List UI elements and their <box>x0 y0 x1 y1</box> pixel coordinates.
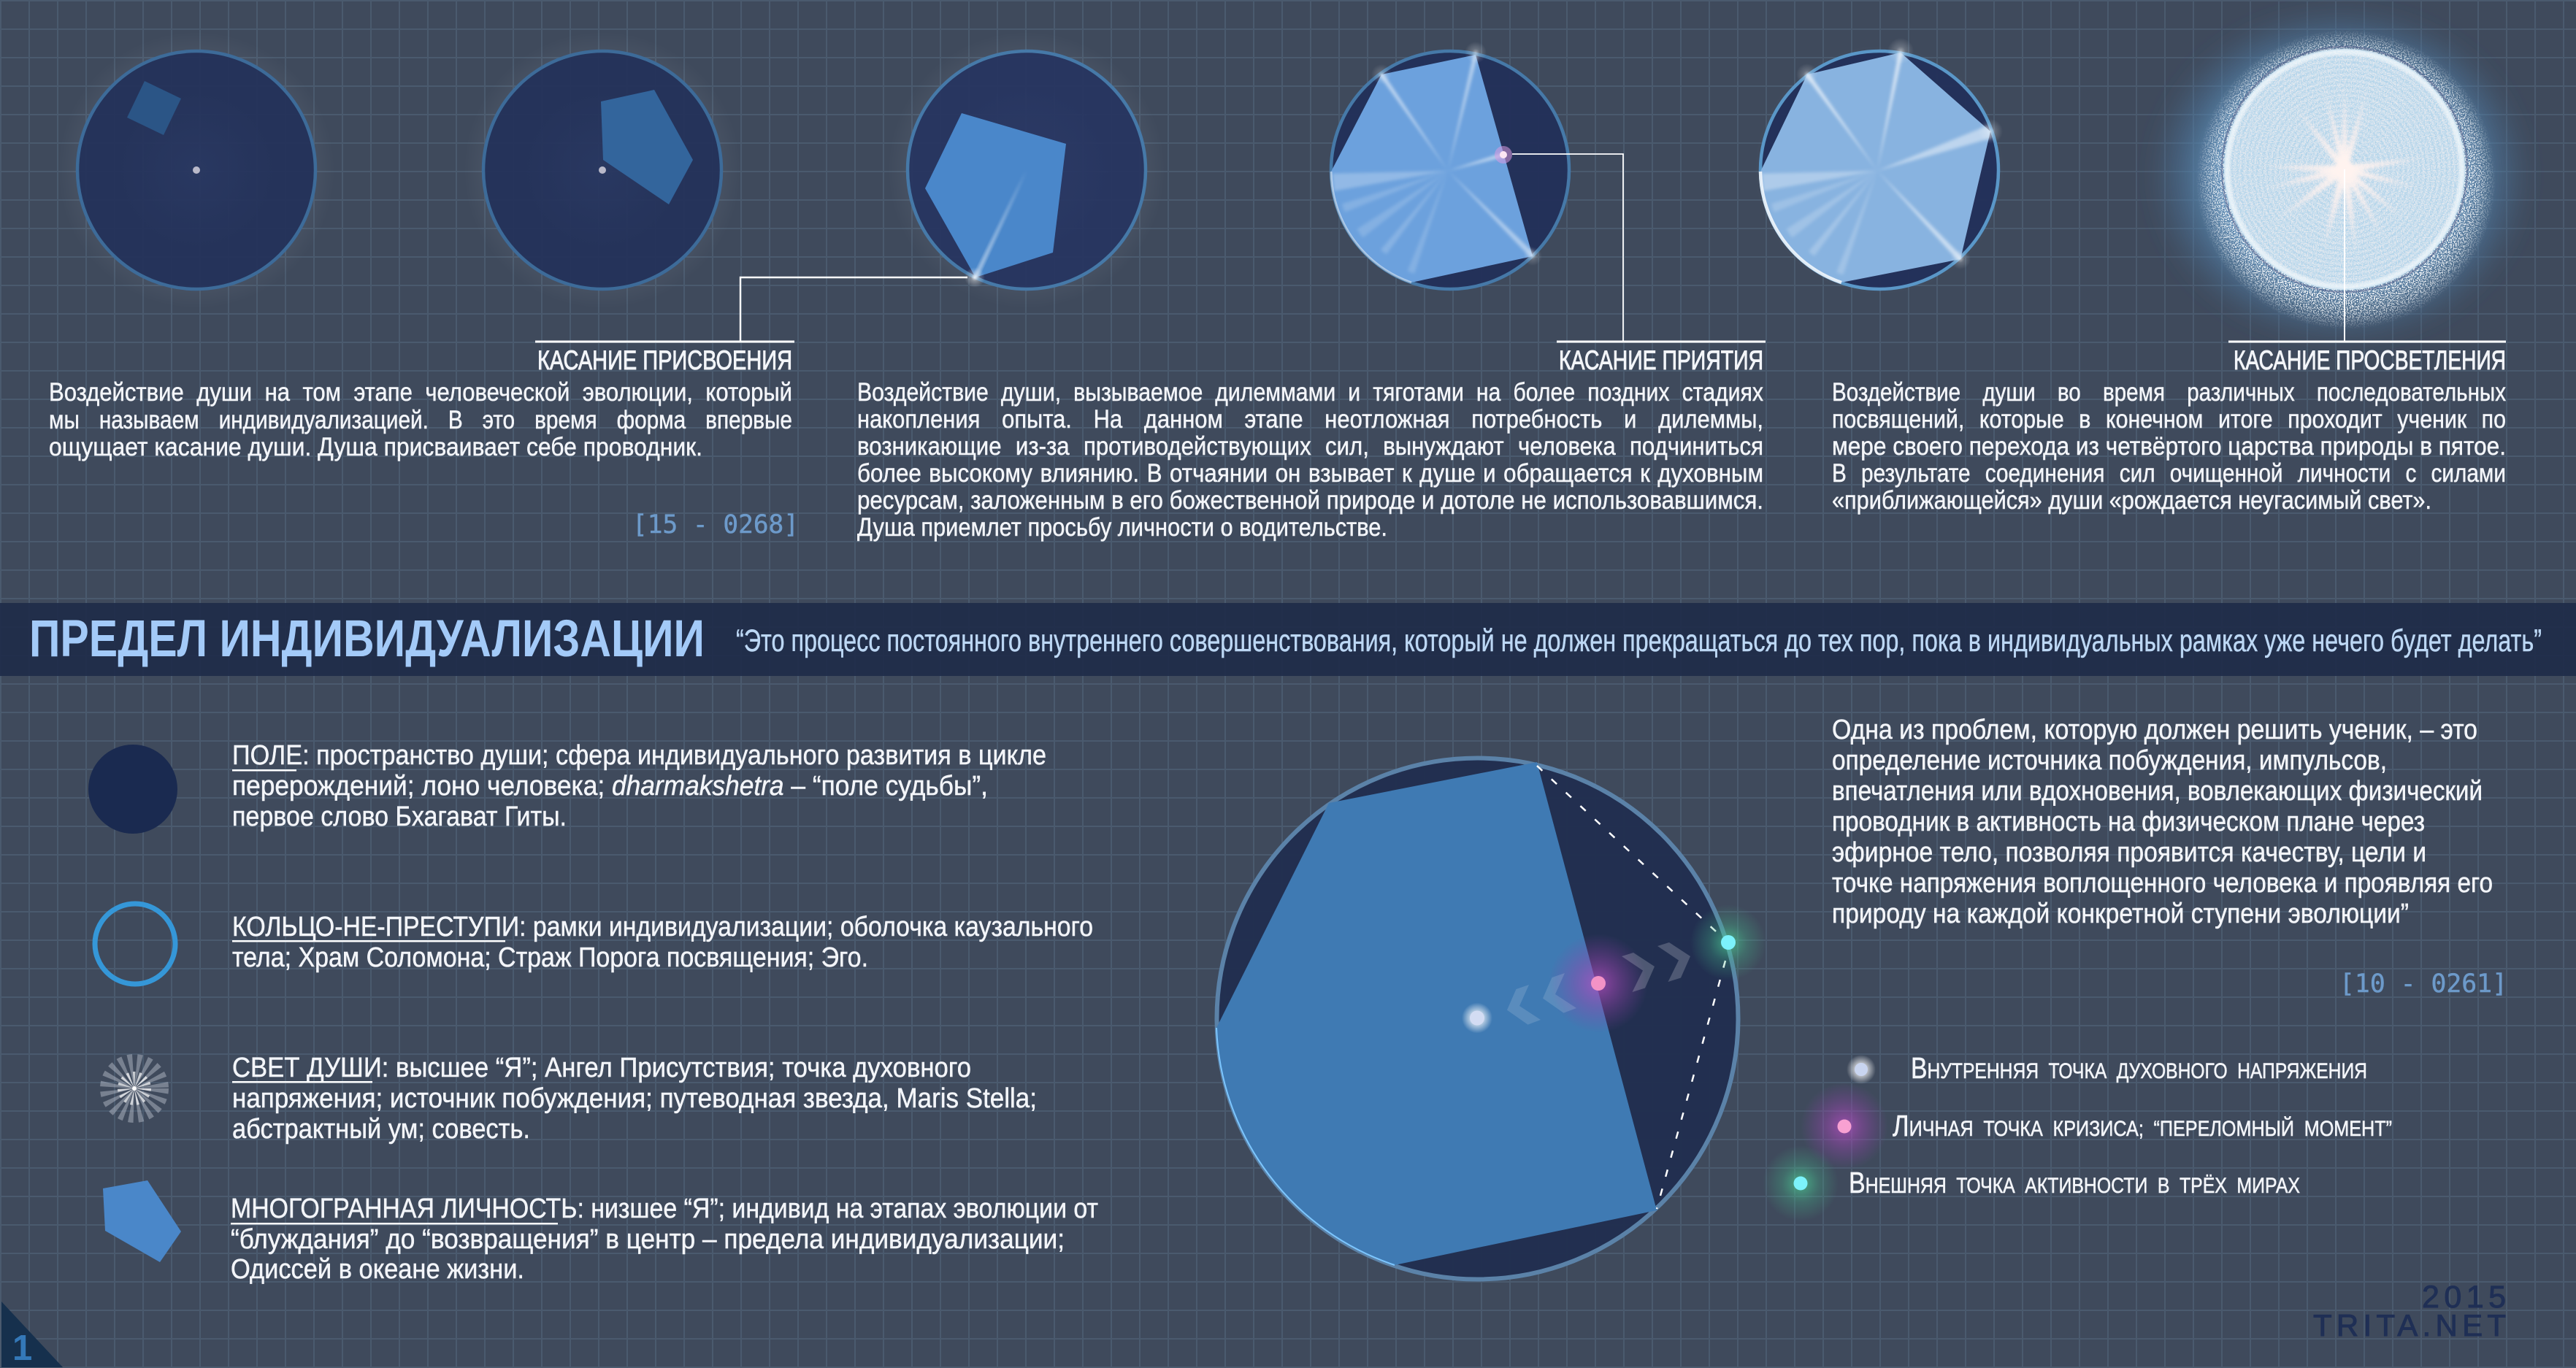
pink crisis glow <box>1549 934 1648 1033</box>
legend text: soul light <box>232 1053 1037 1145</box>
key: inner point: ВНУТРЕННЯЯ ТОЧКА ДУХОВНОГО НАПРЯЖЕНИЯ <box>1911 1051 2367 1085</box>
text block: appropriation: мы называем индивидуализацией. В это время форма впервые <box>49 406 792 434</box>
speckled halo <box>2196 30 2496 329</box>
text block: acceptance: Душа приемлет просьбу личности о водительстве. <box>857 513 1387 542</box>
legend text: ring-pass-not: тела; Храм Соломона; Страж Порога посвящения; Эго. <box>232 942 868 973</box>
inner point of spiritual tension <box>1462 1003 1492 1034</box>
quote text: определение источника побуждения, импульсов, <box>1832 745 2387 776</box>
field circle <box>1216 758 1738 1279</box>
key: outer point: ВНЕШНЯЯ ТОЧКА АКТИВНОСТИ В ТРЁХ МИРАХ <box>1849 1166 2300 1199</box>
text block: acceptance: Воздействие души, вызываемое дилеммами и тяготами на более поздних стадиях <box>857 378 1763 407</box>
quote text: природу на каждой конкретной ступени эволюции” <box>1832 899 2409 929</box>
legend text: field <box>232 740 1046 832</box>
text block: acceptance: возникающие из-за противодействующих сил, вынуждают человека подчиниться <box>857 432 1763 461</box>
credit: site: TRITA.NET <box>2313 1308 2506 1342</box>
icon: field disc <box>88 745 177 834</box>
credit: year: 2015 <box>2422 1280 2506 1315</box>
vertex glows <box>1796 38 2003 269</box>
icon: personality polygon <box>103 1180 181 1262</box>
vertex glows <box>1371 42 1542 266</box>
personality polygon medium <box>601 90 693 204</box>
text block: enlightenment: мере своего перехода из четвёртого царства природы в пятое. <box>1832 432 2506 461</box>
legend text: field: первое слово Бхагават Гиты. <box>232 802 567 832</box>
text block: appropriation <box>49 378 792 461</box>
legend text: soul light: абстрактный ум; совесть. <box>232 1114 530 1145</box>
quote text: впечатления или вдохновения, вовлекающих физический <box>1832 776 2483 807</box>
panel: stage 2 disc <box>464 31 741 309</box>
panel: stage 3 disc <box>888 31 1165 309</box>
soul light point <box>193 166 200 174</box>
connector lines and rules <box>535 154 2506 342</box>
dashed lines to the outer point <box>1537 766 1725 1209</box>
page number corner <box>1 1302 63 1368</box>
text block: enlightenment: «приближающейся» души «рождается неугасимый свет». <box>1832 486 2431 515</box>
quote text: эфирное тело, позволяя проявится качеству, цели и <box>1832 837 2426 868</box>
legend text: personality: Одиссей в океане жизни. <box>231 1254 524 1285</box>
rim highlight <box>1331 172 1411 283</box>
rim highlight <box>1760 172 1841 283</box>
icon: soul light star <box>116 1070 153 1107</box>
legend text: soul light: СВЕТ ДУШИ: высшее “Я”; Ангел Присутствия; точка духовного <box>232 1053 971 1083</box>
main title: ПРЕДЕЛ ИНДИВИДУАЛИЗАЦИИ <box>29 610 705 668</box>
text block: acceptance: накопления опыта. На данном этапе неотложная потребность и дилеммы, <box>857 405 1763 434</box>
central star rays <box>2264 82 2421 261</box>
legend text: field: ПОЛЕ: пространство души; сфера индивидуального развития в цикле <box>232 740 1046 771</box>
light rays <box>1333 55 1536 274</box>
crisis point pink <box>1495 146 1512 164</box>
dark rim fragment <box>2222 47 2467 292</box>
title band <box>0 603 2576 676</box>
page number corner: 1 <box>12 1329 32 1368</box>
quote text: точке напряжения воплощенного человека и проявляя его <box>1832 868 2493 899</box>
disc speckle <box>2226 50 2464 288</box>
panel: stage 1 disc <box>58 31 335 309</box>
quote text: Одна из проблем, которую должен решить ученик, – это <box>1832 715 2477 745</box>
panel: stage 4 disc <box>1331 42 1569 289</box>
text block: acceptance <box>857 378 1763 542</box>
key: crisis point: ЛИЧНАЯ ТОЧКА КРИЗИСА; “ПЕРЕЛОМНЫЙ МОМЕНТ” <box>1893 1109 2392 1142</box>
light rays <box>1762 53 1993 275</box>
personality polygon large <box>925 113 1066 277</box>
polygon edge highlight <box>1216 1028 1395 1265</box>
text block: enlightenment <box>1832 378 2506 515</box>
main diagram <box>1216 758 1766 1279</box>
quote text: проводник в активность на физическом плане через <box>1832 807 2425 837</box>
rim <box>2227 52 2462 287</box>
heading: contact of acceptance: КАСАНИЕ ПРИЯТИЯ <box>1559 345 1763 375</box>
concentric rings <box>2226 50 2464 288</box>
personality polygon near full <box>1331 55 1533 283</box>
inward chevrons <box>1507 973 1576 1025</box>
panel: stage 6 illuminated disc <box>2149 6 2531 345</box>
legend text: personality <box>231 1194 1098 1285</box>
key: outer point <box>1763 1145 2300 1221</box>
disc <box>2224 49 2465 290</box>
ray of contact <box>973 169 1029 278</box>
text block: acceptance: более высокому влиянию. В отчаянии он взывает к душе и обращается к духовным <box>857 459 1763 488</box>
blue aura <box>2149 6 2531 345</box>
personality polygon small <box>127 81 181 135</box>
reference code 10-0261: [10 - 0261] <box>2339 969 2507 999</box>
key: crisis point <box>1801 1083 2392 1170</box>
soul light point <box>599 166 606 174</box>
personal point of crisis <box>1591 976 1606 991</box>
panel: stage 5 disc <box>1754 38 2005 296</box>
heading: contact of appropriation: КАСАНИЕ ПРИСВОЕНИЯ <box>537 345 792 375</box>
outward chevrons <box>1622 942 1690 992</box>
personality polygon almost full <box>1760 53 1990 283</box>
contact point glow <box>965 267 985 288</box>
text block: acceptance: ресурсам, заложенным в его божественной природе и дотоле не использовавшимся. <box>857 486 1763 515</box>
text block: appropriation: Воздействие души на том этапе человеческой эволюции, который <box>49 378 792 407</box>
legend text: soul light: напряжения; источник побуждения; путеводная звезда, Maris Stella; <box>232 1083 1037 1114</box>
reference code 15-0268: [15 - 0268] <box>632 510 799 539</box>
quote text <box>1832 715 2493 929</box>
icon: ring-pass-not <box>95 904 175 984</box>
legend text: ring-pass-not <box>232 912 1093 973</box>
legend text: ring-pass-not: КОЛЬЦО-НЕ-ПРЕСТУПИ: рамки индивидуализации; оболочка каузального <box>232 912 1093 942</box>
personality polygon <box>1216 762 1657 1265</box>
legend text: personality: МНОГОГРАННАЯ ЛИЧНОСТЬ: низшее “Я”; индивид на этапах эволюции от <box>231 1194 1098 1224</box>
outer point of activity <box>1690 904 1766 980</box>
legend text: field: перерождений; лоно человека; dharmakshetra – “поле судьбы”, <box>232 771 988 802</box>
text block: appropriation: ощущает касание души. Душа присваивает себе проводник. <box>49 433 702 461</box>
legend text: personality: “блуждания” до “возвращения” в центр – предела индивидуализации; <box>231 1224 1065 1255</box>
